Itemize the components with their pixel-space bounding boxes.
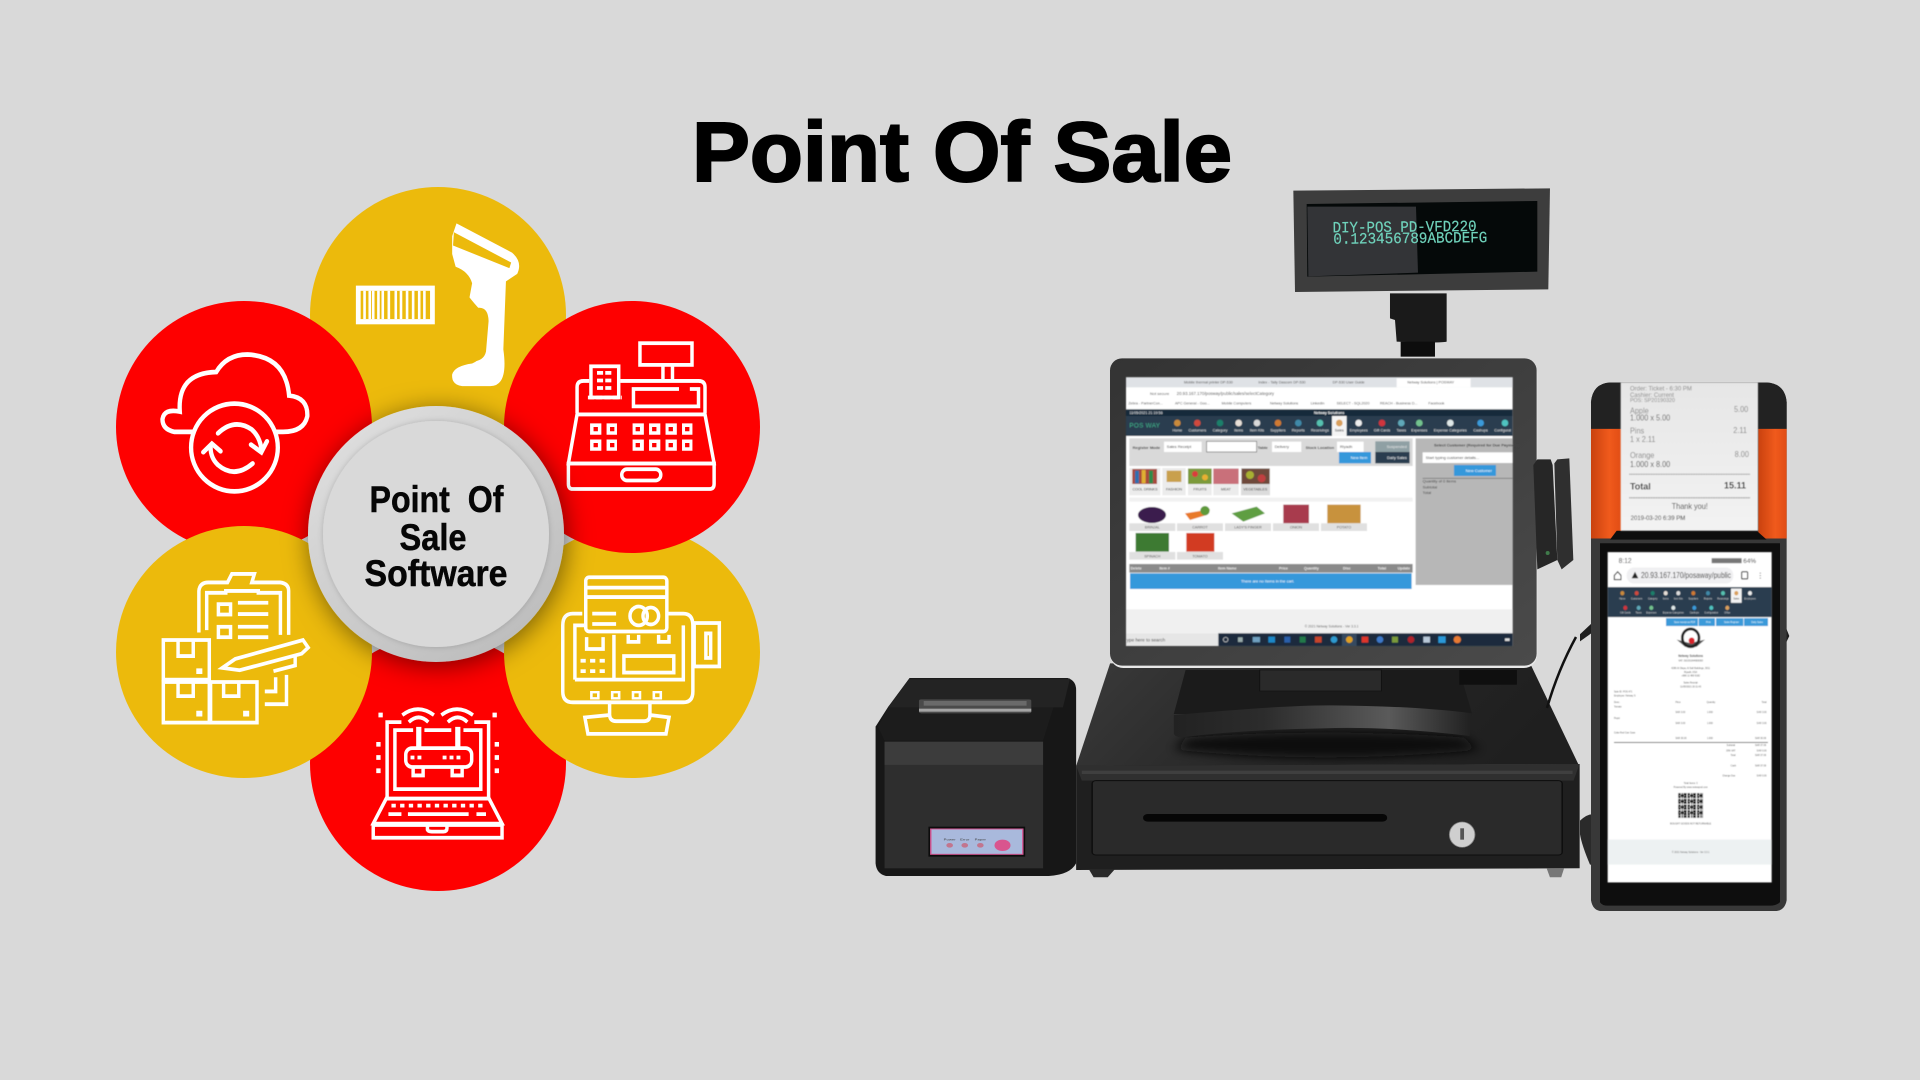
nav labels: Item Kits [1250,428,1264,432]
phone nav labels: Items [1663,597,1669,600]
register controls: Suspended [1387,444,1407,449]
category labels: VEGETABLES [1243,488,1268,492]
POS software screen: 11/05/2021 21:19:56 [1129,411,1163,415]
product labels: CARROT [1192,526,1208,530]
monitor stand [1174,670,1517,757]
nav labels: Cashups [1473,428,1488,432]
invoice text: 4296 Al Olaya, Al Safi Buildings, 3011 [1671,667,1711,670]
nav icons [1174,420,1508,426]
invoice text: +966 11 480 9182 [1681,675,1701,678]
pole display [1293,188,1550,357]
action buttons: Daily Sales [1751,621,1764,624]
register controls: Daily Sales [1387,455,1407,460]
icon: home [1614,572,1621,580]
category labels [1132,488,1268,492]
invoice text: Powered By www.netwaysol.com [1674,786,1708,789]
icon: cloud sync [162,355,307,491]
register controls: Register Mode [1133,445,1161,450]
phone nav labels: Home [1619,597,1626,600]
printed receipt: Orange [1630,451,1654,460]
action buttons: Print [1706,621,1711,624]
browser tabs: 20.93.167.170/posway/public/sales/selectCategory [1177,391,1275,396]
invoice text: 11/05/2021 20:11:45 [1680,685,1702,688]
register controls: Stock Location [1306,445,1335,450]
browser tabs: REACH - Business D... [1380,402,1418,406]
petal: lower-right yellow [504,526,760,778]
icon: laptop with router [373,709,502,838]
invoice text: SAR 0.00 [1757,774,1767,777]
invoice text: Employee: Netway S [1614,694,1636,697]
petal: upper-right red [504,301,760,553]
phone screen: 20.93.167.170/posaway/public [1641,571,1731,580]
cart header: Delete [1131,567,1142,571]
invoice text [1614,654,1767,826]
company logo [1677,629,1705,647]
phone nav labels: Cashups [1690,611,1700,615]
icon: cash register [568,343,714,489]
phone nav labels: Office [1724,611,1731,615]
action buttons [1666,618,1768,626]
display readout: 0.123456789ABCDEFG [1333,229,1487,249]
QR code [1678,793,1703,818]
petal: top yellow [310,187,566,443]
nav labels: Home [1172,428,1182,432]
phone nav labels: Customers [1631,597,1643,600]
cart header: Update [1398,567,1410,571]
cart header: Quantity [1304,567,1320,571]
invoice text: SAR 37.00 [1755,764,1767,767]
register controls: Select Customer (Required for Due Payment) [1434,443,1520,448]
product labels: TOMATO [1192,554,1208,558]
register controls: New Customer [1466,468,1493,473]
nav labels [1172,428,1511,432]
printed receipt: 1.000 x 5.00 [1630,413,1670,422]
phone screen: 8:12 [1619,558,1632,565]
phone nav labels: Receivings [1717,597,1729,600]
invoice text: Total [1731,754,1736,757]
icon: inventory clipboard and boxes [163,574,308,723]
icon: card payment terminal [563,577,719,734]
product labels: SPINACH [1144,554,1161,558]
center text: Sale [400,517,466,558]
browser tabs: SELECT - SQL2020 [1337,402,1370,406]
nav labels: Taxes [1397,428,1406,432]
browser tabs: Facebook [1428,402,1445,406]
product labels: POTATO [1337,526,1351,530]
printed receipt: Apple [1630,406,1649,416]
invoice text: Price [1675,701,1681,704]
invoice text: SAR 0.00 [1757,749,1767,752]
printer panel labels: Paper [975,838,987,841]
printed receipt: Pins [1630,426,1644,436]
invoice text: 1.000 [1707,722,1713,725]
browser tabs: DP-530 User Guide [1333,381,1365,385]
flower diagram [116,187,760,891]
phone nav labels: Configuration [1704,611,1719,615]
center text [364,479,508,594]
action buttons: Save receipt as PDF [1674,621,1696,624]
register controls: Sales Receipt [1167,444,1192,449]
nav labels: Items [1234,428,1243,432]
printed receipt: 5.00 [1734,405,1748,414]
invoice text: Pepsi [1614,717,1620,720]
cart header: Total [1378,567,1386,571]
phone nav labels: Suppliers [1688,597,1699,600]
invoice text: SAR 30.00 [1755,737,1767,740]
invoice text: Subtotal [1727,744,1736,747]
invoice text: SAR 3.00 [1757,711,1767,714]
category labels: MEAT [1221,488,1232,492]
center disc [308,406,564,662]
display readout: DIY-POS PD-VFD220 [1332,218,1477,237]
product labels: LADY'S FINGER [1234,526,1262,530]
register controls: Delivery [1275,444,1289,449]
nav labels: Receivings [1311,428,1329,432]
invoice text: Total [1762,701,1767,704]
cart header: Item # [1159,567,1170,571]
printed receipt: Thank you! [1672,502,1708,511]
product labels [1144,526,1351,558]
invoice text: Sales Receipt [1683,681,1698,685]
petal: upper-left red [116,301,372,553]
center text: Point Of [370,479,504,520]
invoice text: Tomato [1614,705,1622,708]
printed receipt: 2.11 [1733,426,1747,435]
POS software screen: There are no Items in the cart. [1241,579,1294,584]
browser tabs: Zebra - PartnerCon... [1128,402,1163,406]
invoice text: Riyadh, KSA [1684,671,1698,674]
phone nav icons [1620,591,1752,610]
invoice text: 1.000 [1707,737,1713,740]
petal: lower-left yellow [116,526,372,778]
nav labels: Sales [1335,428,1344,432]
invoice text: Cash [1731,764,1737,767]
phone nav labels: Employees [1744,597,1756,600]
phone screen: © 2021 Netway Solutions - Ver 3.3.1 [1672,851,1710,854]
printed receipt: 15.11 [1724,480,1746,491]
invoice text: SAR 30.00 [1675,737,1687,740]
invoice text: Sale ID: POS 471 [1614,690,1633,693]
category labels: FRUITS [1193,488,1207,492]
phone nav labels: Gift Cards [1620,611,1631,615]
phone nav labels: Category [1648,597,1658,600]
invoice text: 1.000 [1707,711,1713,714]
POS software screen: Netway Solutions [1314,411,1344,415]
nav labels: Suppliers [1270,428,1286,432]
browser tabs: Mobile thermal printer DP-530 [1184,381,1233,385]
invoice text: VAT: 310151044900003 [1678,660,1704,663]
product labels: BRINJAL [1145,526,1160,530]
printed receipt: Order: Ticket - 6:30 PM [1630,386,1692,393]
nav labels: Category [1213,428,1228,432]
browser tabs: Netway Solutions | POSWAY [1407,381,1455,385]
browser tabs: Mobile Computers [1222,402,1251,406]
browser tabs: Index - Tally Dascom DP-530 [1258,381,1306,385]
product labels: ONION [1290,526,1302,530]
printed receipt: POS: SP20190320 [1630,398,1675,404]
register controls: Riyadh [1340,444,1352,449]
center text: Software [364,553,508,594]
cart header: Item Name [1218,567,1236,571]
phone nav labels [1619,597,1756,615]
POS software screen: © 2021 Netway Solutions - Ver 3.3.1 [1305,624,1359,628]
cart header [1131,567,1410,571]
category labels: FASHION [1166,488,1182,492]
browser tabs: LinkedIn [1311,402,1324,406]
printer panel labels: Power [944,838,957,841]
nav labels: Employees [1350,428,1368,432]
register controls: Quantity of 0 Items [1423,479,1456,484]
cart header: Disc [1343,567,1351,571]
petal: bottom red [310,635,566,891]
phone nav labels: Taxes [1636,611,1642,615]
printed receipt: 1 x 2.11 [1630,435,1655,444]
invoice text: SAR 3.00 [1675,722,1686,725]
product tiles [1129,505,1367,560]
invoice text: Quantity [1707,701,1716,704]
cart header: Price [1279,567,1288,571]
printed receipt: 2019-03-20 6:39 PM [1631,515,1685,522]
register controls: Subtotal [1423,484,1437,489]
display readout [1332,218,1487,249]
register controls: New Item [1351,455,1368,460]
phone nav labels: Expenses [1646,611,1657,615]
invoice text: SAR 37.00 [1755,754,1767,757]
invoice text: Total Items: 3 [1684,782,1698,785]
category labels: COOL DRINKS [1132,488,1158,492]
invoice text: Desc. [1614,701,1620,704]
POS software screen [1126,377,1520,646]
register controls: Table [1258,445,1269,450]
phone nav labels: Sales [1733,597,1740,600]
handheld POS terminal [1580,382,1789,911]
taskbar icons [1223,634,1510,646]
nav labels: Reports [1292,428,1305,432]
action buttons: Sales Register [1724,621,1739,624]
invoice text: Netway Solutions [1678,654,1703,658]
printed receipt [1621,382,1758,531]
nav labels: Expense Categories [1434,428,1467,432]
register controls [1133,441,1520,495]
invoice text: Change Due [1722,774,1736,777]
nav labels: Configurat [1494,428,1511,432]
printed receipt: Cashier: Current [1630,392,1674,399]
phone screen [1608,552,1772,882]
category tiles [1129,468,1270,495]
browser tabs: Netway Solutions [1270,402,1298,406]
POS software screen: POS WAY [1129,423,1161,430]
nav labels: Customers [1188,428,1206,432]
browser tabs: APC General - Goo... [1175,402,1210,406]
phone nav labels: Item Kits [1674,597,1684,600]
invoice text: SAR 3.00 [1675,711,1686,714]
register controls: Total [1423,490,1431,495]
invoice text: BOUGHT GOODS NOT RETURNABLE [1670,823,1712,826]
phone nav labels: Reports [1704,597,1713,600]
printer panel labels: Error [960,838,970,841]
touchscreen monitor [1110,358,1537,668]
invoice text: 15% VAT [1726,749,1736,752]
invoice text: SAR 37.00 [1755,744,1767,747]
cash drawer [1076,663,1580,877]
phone screen: 64% [1743,558,1756,565]
title: Point Of Sale [692,105,1232,199]
browser tabs: Not secure [1150,391,1170,396]
icon: barcode scanner [356,223,519,386]
nav labels: Expenses [1411,428,1427,432]
printed receipt: Total [1630,481,1651,492]
lock [1449,822,1475,847]
invoice text: SAR 3.00 [1757,722,1767,725]
POS software screen: ype here to search [1127,637,1166,642]
phone nav labels: Expense Categories [1663,611,1685,615]
printed receipt: 8.00 [1735,450,1749,459]
register controls: Start typing customer details... [1426,455,1479,460]
nav labels: Gift Cards [1374,428,1390,432]
magnetic card reader [1533,458,1573,569]
receipt printer [876,678,1076,876]
printed receipt: 1.000 x 8.00 [1630,460,1670,469]
browser tabs [1128,381,1455,406]
cable [1547,637,1576,708]
invoice text: Coke Red Can Case [1614,731,1636,735]
printer panel labels [944,838,987,841]
